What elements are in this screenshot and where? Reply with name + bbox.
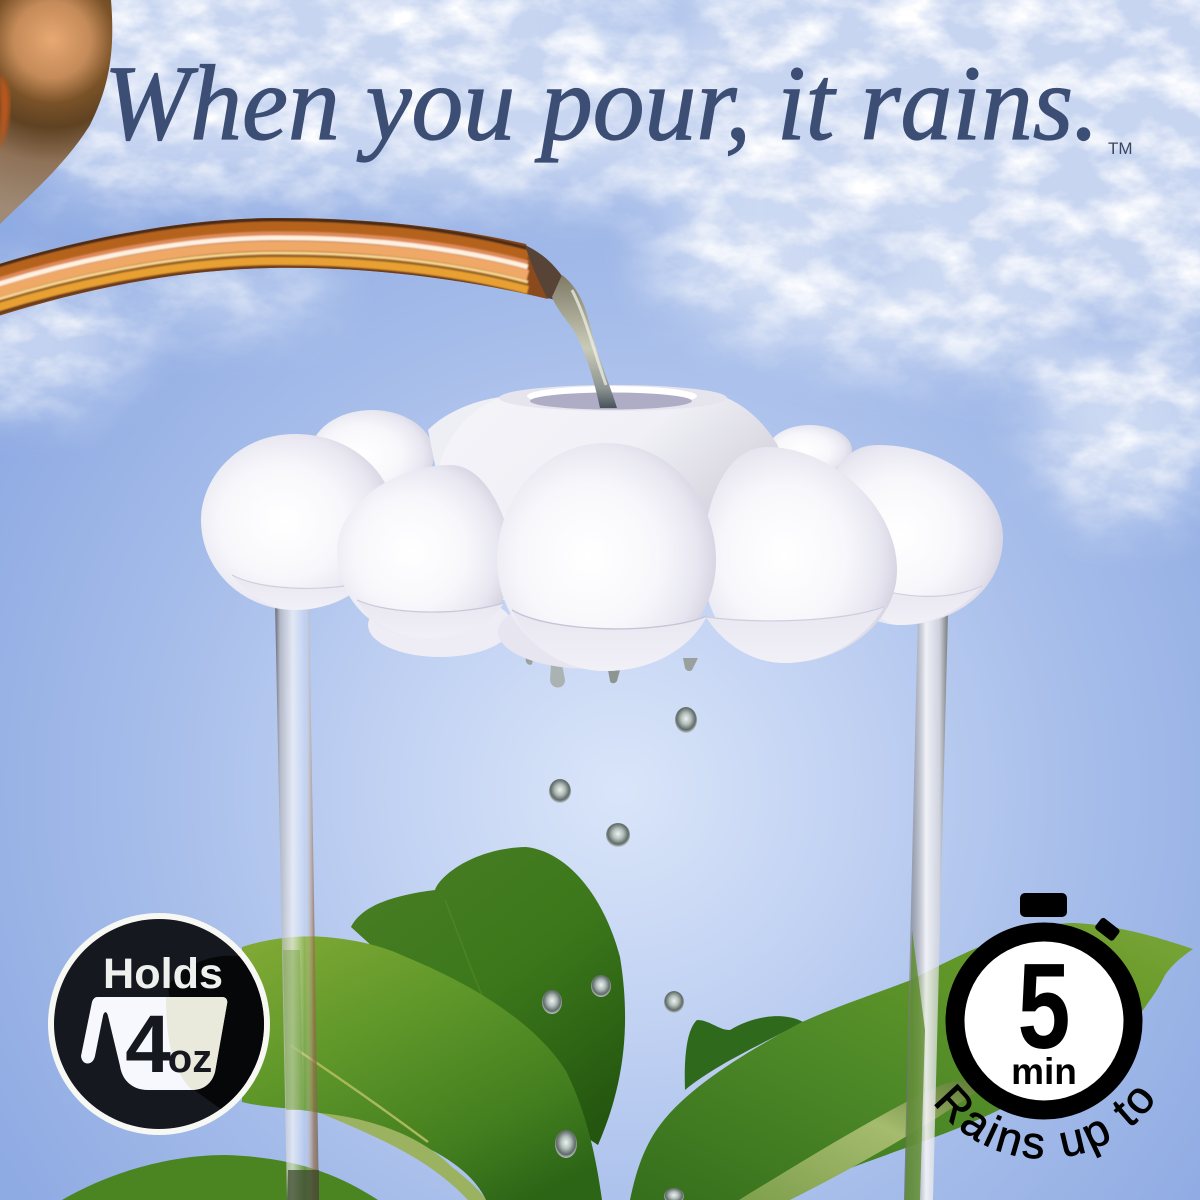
badge black disc <box>54 919 264 1129</box>
cloud far right lobe <box>825 445 1003 625</box>
blue sky gaps in the clouds <box>570 0 1170 354</box>
cloud filling hole rim <box>499 385 727 411</box>
badge: holds 4 oz <box>48 913 270 1135</box>
drip nozzles under the cloud <box>525 655 698 688</box>
water drops falling <box>542 707 697 1200</box>
badge number 4: 4 <box>125 999 171 1090</box>
left glass rod <box>275 600 319 1200</box>
icon: measuring cup <box>81 997 227 1090</box>
trademark symbol: TM <box>1108 139 1133 158</box>
leaf: back centre <box>351 847 625 1145</box>
cloud lower left lobe <box>368 593 512 657</box>
cloud rim highlight <box>527 386 697 406</box>
timer unit min: min <box>1011 1051 1077 1092</box>
leaf: front left <box>242 936 602 1200</box>
timer side button <box>1094 917 1121 942</box>
soft cloud haze in the sky <box>0 0 1200 515</box>
title: When you pour, it rains. <box>104 45 1099 163</box>
white ceramic cloud <box>201 385 1003 671</box>
badge label holds: Holds <box>103 950 223 998</box>
cloud bottom centre under-lobe <box>498 595 682 669</box>
timer top button <box>1020 893 1067 917</box>
cloud centre lobe <box>497 443 716 671</box>
pouring water stream <box>552 275 617 408</box>
cloud left lobe <box>201 434 395 610</box>
leaf: lower left <box>62 1155 378 1200</box>
cloud rear shoulder <box>428 396 510 520</box>
leaf: small centre right <box>685 1016 803 1090</box>
timer curved caption: Rains up to <box>934 1084 1153 1159</box>
cloud back bump right <box>768 425 852 475</box>
cloud top body <box>438 394 790 600</box>
badge white ring <box>48 913 270 1135</box>
badge unit oz: oz <box>168 1037 212 1081</box>
cloud second lobe <box>337 465 513 638</box>
wispy white cloud streaks <box>0 0 1200 515</box>
badge shaded overlap <box>168 956 264 1109</box>
spout mouth <box>525 245 562 300</box>
cloud back bump left <box>310 410 434 500</box>
badge shaded cup part <box>166 997 227 1090</box>
timer number 5: 5 <box>1018 939 1070 1075</box>
leaf: right large <box>630 923 1193 1200</box>
leaf: curled edge <box>320 1113 486 1200</box>
cloud right lobe <box>703 447 897 663</box>
badge: rains up to 5 min timer <box>934 893 1153 1159</box>
cloud filling hole <box>530 392 692 410</box>
copper spout <box>0 218 548 316</box>
timer ring <box>955 932 1133 1110</box>
copper watering can body <box>0 0 112 224</box>
right glass rod <box>904 612 948 1200</box>
